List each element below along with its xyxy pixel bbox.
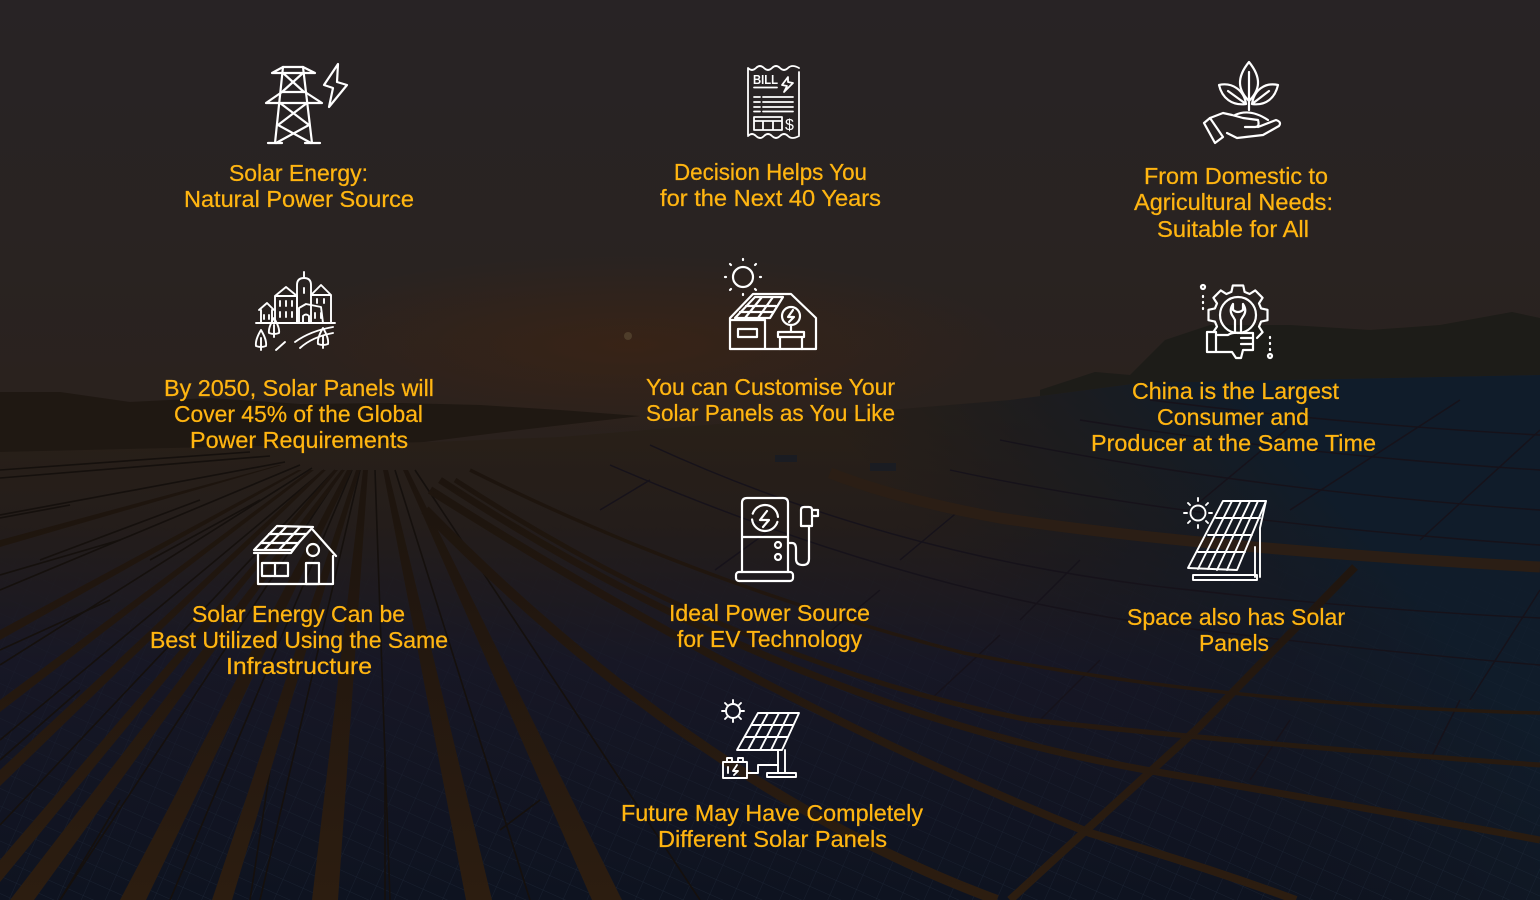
- heading: You can Customise Your: [646, 374, 895, 400]
- icon: hand holding plant: [1204, 62, 1280, 143]
- panel: natural power source: [184, 64, 414, 212]
- panel: 2050 global power: [164, 272, 434, 453]
- heading: [660, 159, 881, 211]
- heading: By 2050, Solar Panels will: [164, 375, 434, 401]
- panel: future solar panels: [621, 700, 923, 852]
- heading: Best Utilized Using the Same: [150, 627, 448, 653]
- heading: Different Solar Panels: [658, 826, 887, 852]
- heading: Natural Power Source: [184, 186, 414, 212]
- heading: Solar Energy Can be: [192, 601, 405, 627]
- heading: [150, 601, 448, 679]
- panel: china largest: [1091, 285, 1376, 456]
- icon: electricity bill: [748, 66, 799, 138]
- icon: gear wrench and hand: [1201, 285, 1272, 358]
- icon: sun and house with solar roof: [725, 259, 816, 349]
- heading: Cover 45% of the Global: [174, 401, 423, 427]
- heading: Producer at the Same Time: [1091, 430, 1376, 456]
- icon: town and road: [256, 272, 335, 350]
- icon: sun and tilted solar panel: [1184, 498, 1266, 580]
- heading: Solar Energy:: [229, 160, 368, 186]
- heading: [184, 160, 414, 212]
- heading: Ideal Power Source: [669, 600, 870, 626]
- heading: [164, 375, 434, 453]
- panel: next 40 years: [660, 66, 881, 211]
- heading: China is the Largest: [1132, 378, 1340, 404]
- heading: [1134, 163, 1333, 242]
- panel: domestic to agricultural: [1134, 62, 1333, 242]
- panel: EV technology: [669, 498, 870, 652]
- heading: [621, 800, 923, 852]
- heading: From Domestic to: [1144, 163, 1328, 189]
- panel: space solar panels: [1127, 498, 1345, 656]
- heading: [669, 600, 870, 652]
- icon: solar panel with battery: [722, 700, 799, 778]
- heading: Power Requirements: [190, 427, 408, 453]
- symbol: dollar: $: [785, 117, 794, 134]
- icon: EV charging station: [736, 498, 818, 581]
- panel: same infrastructure: [150, 526, 448, 679]
- heading: [1127, 604, 1345, 656]
- heading: Decision Helps You: [674, 159, 867, 185]
- label: bill: BILL: [753, 73, 778, 87]
- heading: Solar Panels as You Like: [646, 400, 895, 426]
- icon: house with solar panels: [254, 526, 336, 584]
- heading: Space also has Solar: [1127, 604, 1345, 630]
- heading: Future May Have Completely: [621, 800, 923, 826]
- panel: customise solar panels: [646, 259, 895, 426]
- heading: Agricultural Needs:: [1134, 189, 1333, 215]
- heading: for EV Technology: [677, 626, 862, 652]
- heading: [646, 374, 895, 426]
- heading: for the Next 40 Years: [660, 185, 881, 211]
- heading: Consumer and: [1157, 404, 1309, 430]
- heading: Panels: [1199, 630, 1269, 656]
- icon: transmission tower with lightning: [266, 64, 347, 143]
- heading: Infrastructure: [226, 653, 372, 679]
- heading: Suitable for All: [1157, 216, 1309, 242]
- heading: [1091, 378, 1376, 456]
